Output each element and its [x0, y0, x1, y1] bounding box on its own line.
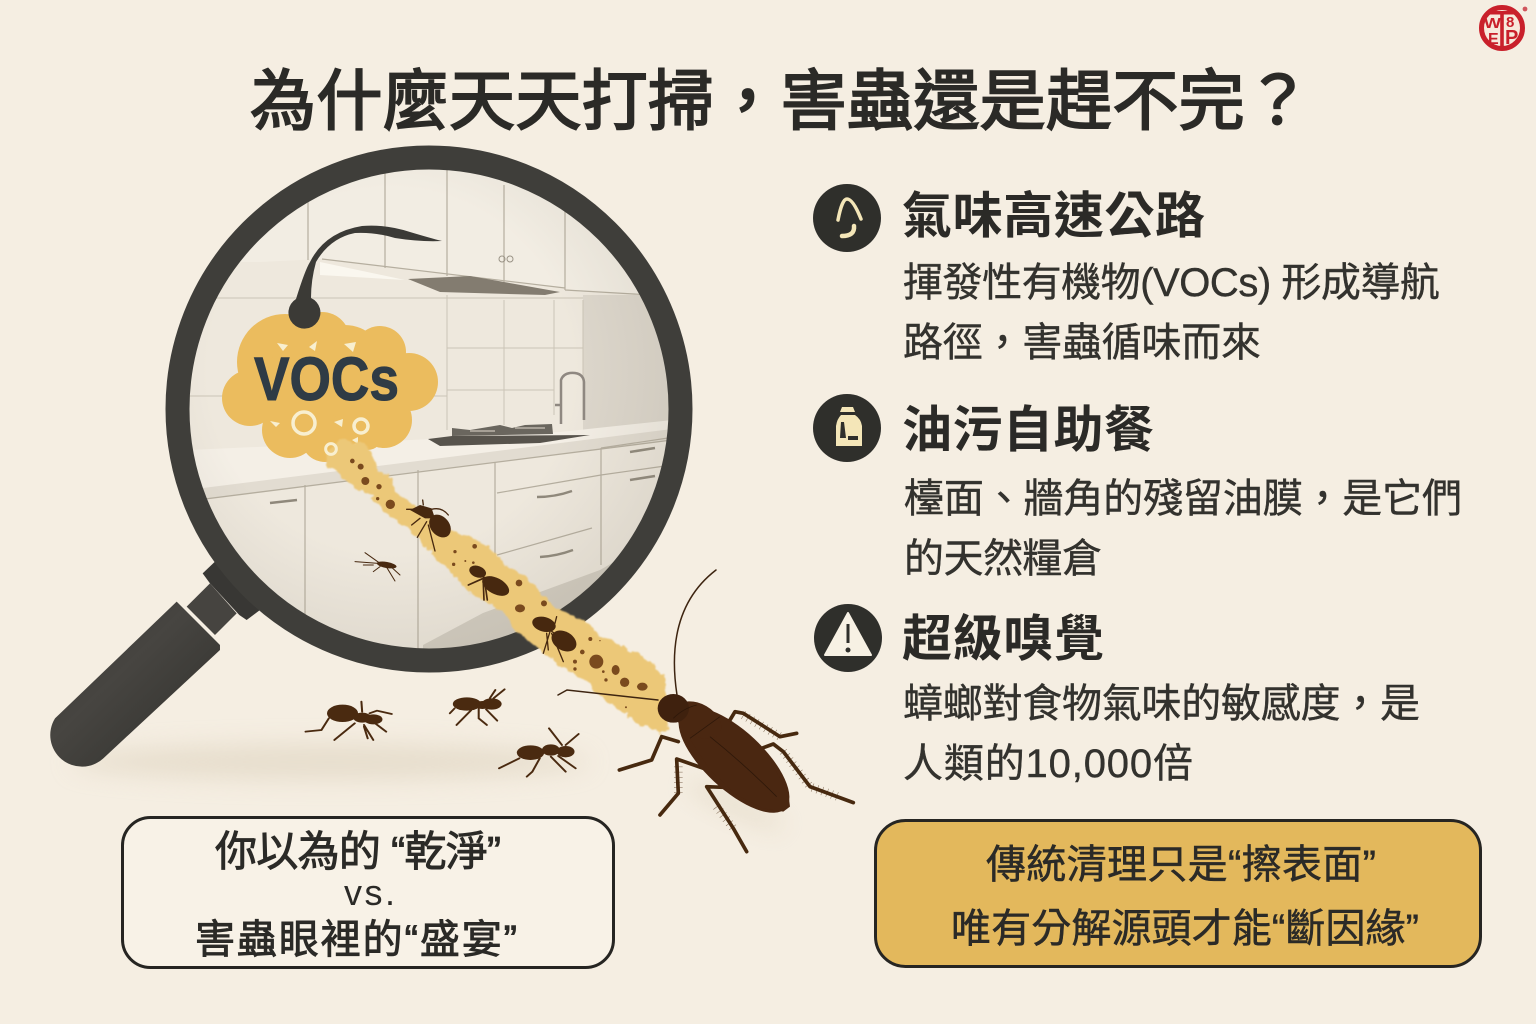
title: 為什麼天天打掃，害蟲還是趕不完？: [250, 64, 1311, 138]
heading: 超級嗅覺: [902, 611, 1104, 667]
callout: source: 唯有分解源頭才能“斷因緣”: [951, 907, 1419, 951]
callout: source: [876, 820, 1480, 966]
floor shadow: [70, 744, 590, 780]
logo: [1482, 7, 1527, 49]
range hood: [408, 276, 560, 295]
heading: 氣味高速公路: [902, 188, 1205, 244]
lens ring: [178, 158, 680, 660]
cockroach: [558, 570, 853, 852]
logo: E: [1488, 31, 1499, 48]
body text: 揮發性有機物(VOCs) 形成導航: [903, 261, 1440, 305]
faucet: [555, 373, 584, 424]
feature 3: 人類的10,000倍: [903, 742, 1193, 786]
ants on trail: [355, 500, 580, 662]
icon: oil bottle: [813, 394, 881, 462]
callout: clean vs feast: 害蟲眼裡的“盛宴”: [195, 918, 517, 962]
magnifying glass illustration: [50, 158, 853, 852]
scent trail: [326, 443, 665, 730]
VOCs cloud: VOCs: [254, 345, 399, 413]
magnifier handle: [50, 562, 260, 767]
ants on floor: [306, 689, 579, 777]
lower cabinets: [270, 438, 670, 660]
wall tiles: [189, 262, 673, 430]
body text: 檯面、牆角的殘留油膜，是它們: [904, 477, 1462, 521]
logo: W: [1484, 15, 1502, 32]
kitchen scene in lens: [185, 165, 675, 660]
VOCs cloud: [222, 312, 438, 462]
stove: [428, 424, 590, 446]
feature 1: [813, 184, 1440, 365]
callout: clean vs feast: vs.: [344, 872, 395, 913]
feature 2: [813, 394, 1462, 581]
icon: warning triangle: [814, 604, 882, 672]
callout: clean vs feast: [122, 818, 614, 968]
heading: 油污自助餐: [902, 402, 1154, 458]
logo: 8: [1506, 14, 1514, 31]
feature 2: 的天然糧倉: [904, 537, 1102, 581]
callout: source: 傳統清理只是“擦表面”: [986, 843, 1376, 887]
icon: nose scent: [813, 184, 881, 252]
logo: P: [1505, 27, 1518, 49]
smell tail: [288, 226, 442, 329]
feature 3: [814, 604, 1420, 786]
callout: clean vs feast: 你以為的 “乾淨”: [215, 828, 501, 875]
body text: 蟑螂對食物氣味的敏感度，是: [903, 682, 1420, 726]
upper cabinets: [307, 170, 640, 295]
countertop: [194, 420, 668, 488]
feature 1: 路徑，害蟲循味而來: [903, 321, 1261, 365]
